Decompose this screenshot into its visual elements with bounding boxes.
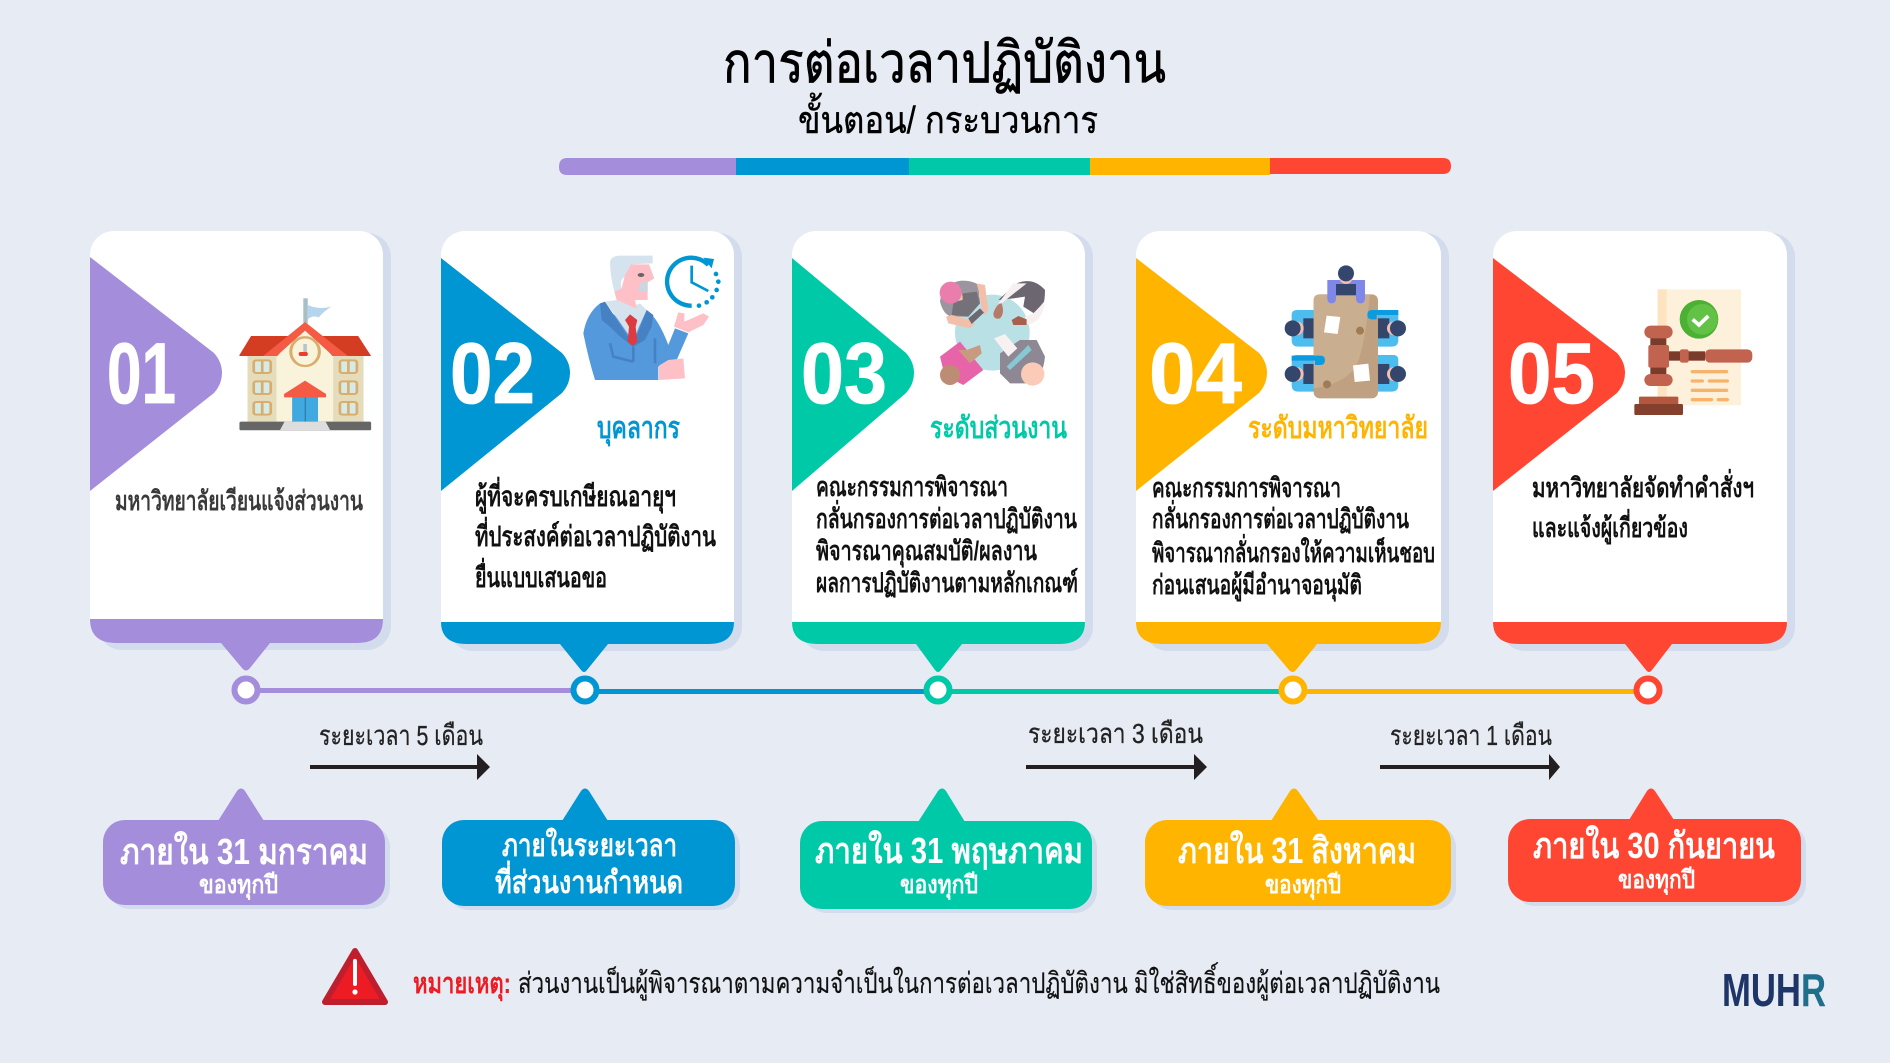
deadline box 4 [1145,788,1456,910]
step 4 text: พิจารณากลั่นกรองให้ความเห็นชอบ [1152,533,1435,568]
step 3 heading: ระดับส่วนงาน [930,412,1067,445]
colour bar [559,158,1451,175]
step 3 text: กลั่นกรองการต่อเวลาปฏิบัติงาน [816,499,1077,534]
step 3 triangle [792,258,914,491]
deadline box 4: ของทุกปี [1265,871,1341,901]
deadline box 1: ภายใน 31 มกราคม [120,830,368,872]
title: การต่อเวลาปฏิบัติงาน [723,31,1166,94]
arrow: 3 months [1026,754,1207,780]
deadline box 5: ของทุกปี [1618,866,1695,896]
step 4 number: 04 [1149,326,1242,422]
step 4 text: กลั่นกรองการต่อเวลาปฏิบัติงาน [1152,499,1409,534]
step 2 text [475,476,716,593]
panel: step 3 [792,231,1093,672]
duration label: 3 months: ระยะเวลา 3 เดือน [1028,718,1203,749]
step 2 text: ที่ประสงค์ต่อเวลาปฏิบัติงาน [475,516,716,553]
step 4 text [1152,473,1435,602]
step 5 text [1532,468,1754,545]
step 4 text: ก่อนเสนอผู้มีอำนาจอนุมัติ [1152,570,1362,602]
step 5 triangle [1493,258,1625,491]
step 5 text: มหาวิทยาลัยจัดทำคำสั่งฯ [1532,468,1754,503]
step 2 heading: บุคลากร [597,412,680,447]
step 5 text: และแจ้งผู้เกี่ยวข้อง [1532,508,1688,545]
step 4 heading: ระดับมหาวิทยาลัย [1248,412,1428,445]
timeline [234,678,1660,702]
deadline box 3: ของทุกปี [900,871,978,901]
deadline box 1 [103,788,390,909]
icon: warning [325,951,385,1002]
duration label: 5 months: ระยะเวลา 5 เดือน [319,720,483,751]
deadline box 4: ภายใน 31 สิงหาคม [1178,829,1416,871]
step 1 triangle [90,257,222,491]
step 1 text: มหาวิทยาลัยเวียนแจ้งส่วนงาน [115,486,363,516]
step 1 number: 01 [107,326,176,422]
deadline box 1: ของทุกปี [199,871,278,901]
icon: meeting table [1285,265,1406,398]
icon: person with clock [583,256,721,380]
step 3 text: ผลการปฏิบัติงานตามหลักเกณฑ์ [816,567,1078,598]
note text: ส่วนงานเป็นผู้พิจารณาตามความจำเป็นในการต่อเวลาปฏิบัติงาน มิใช่สิทธิ์ของผู้ต่อเวลาปฏิบัติงาน [518,962,1440,1001]
panel: step 5 [1493,231,1795,672]
deadline box 3 [800,788,1097,913]
step 3 text: พิจารณาคุณสมบัติ/ผลงาน [816,536,1037,568]
deadline box 2: ที่ส่วนงานกำหนด [495,860,683,900]
step 2 text: ยื่นแบบเสนอขอ [475,557,607,593]
step 2 triangle [441,258,570,491]
icon: school [239,298,371,430]
deadline box 2: ภายในระยะเวลา [502,827,677,863]
arrow: 1 month [1380,754,1560,780]
step 4 triangle [1136,258,1267,491]
deadline box 2 [442,788,740,910]
step 3 text [816,472,1078,598]
duration label: 1 month: ระยะเวลา 1 เดือน [1390,720,1552,751]
deadline box 5 [1508,788,1806,906]
icon: gavel and document [1634,289,1752,415]
step 3 text: คณะกรรมการพิจารณา [816,472,1008,502]
deadline box 5: ภายใน 30 กันยายน [1533,824,1775,866]
deadline box 3: ภายใน 31 พฤษภาคม [815,829,1083,871]
arrow: 5 months [310,754,490,780]
panel: step 1 [90,231,391,670]
step 4 text: คณะกรรมการพิจารณา [1152,473,1341,503]
note label: หมายเหตุ: [413,968,511,1001]
panel: step 2 [441,231,742,672]
panel: step 4 [1136,231,1449,672]
step 5 number: 05 [1508,326,1595,422]
logo: MUHR [1722,964,1826,1016]
step 2 text: ผู้ที่จะครบเกษียณอายุฯ [475,476,676,514]
step 2 number: 02 [450,326,535,422]
step 3 number: 03 [801,326,887,422]
icon: team around a table [940,281,1045,386]
subtitle: ขั้นตอน/ กระบวนการ [798,92,1098,142]
